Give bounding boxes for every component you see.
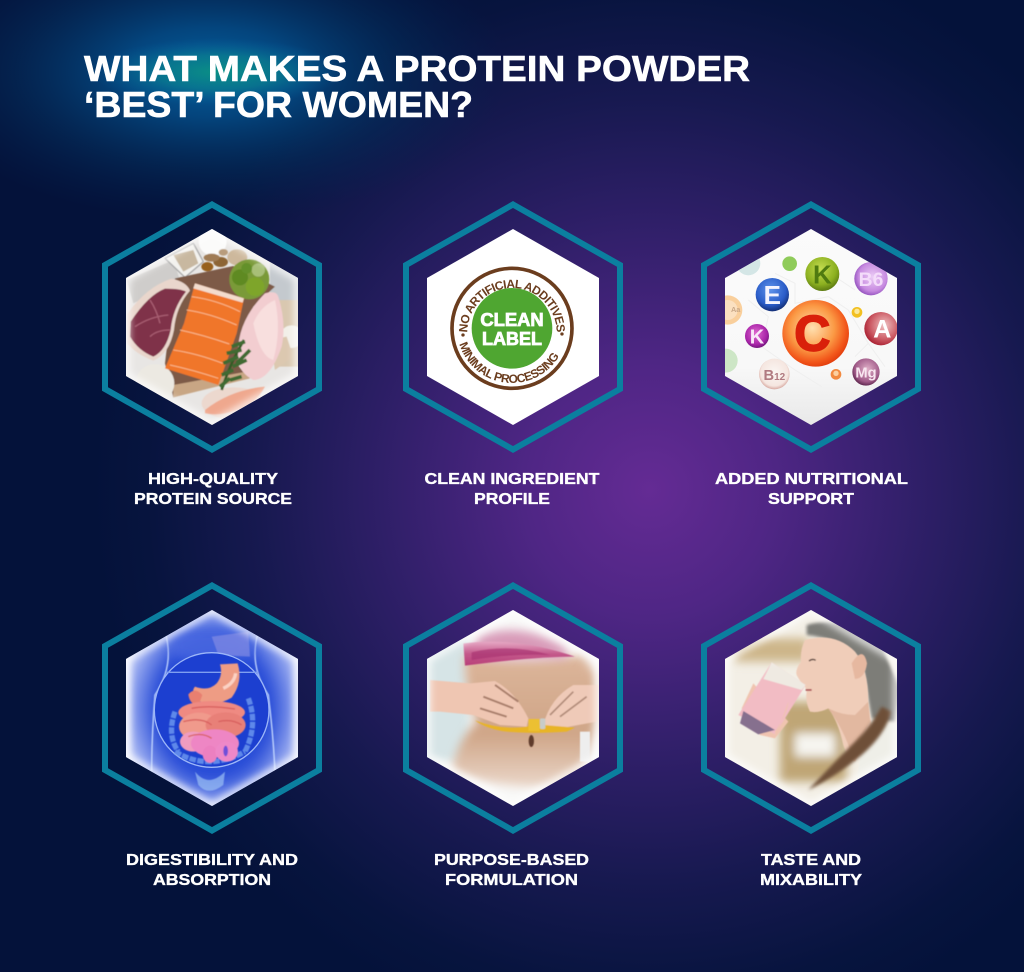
title (84, 48, 750, 125)
label (715, 471, 908, 508)
label: HIGH-QUALITY (148, 471, 279, 488)
hexagon frame (105, 586, 319, 830)
label (134, 471, 292, 508)
title: WHAT MAKES A PROTEIN POWDER (84, 48, 750, 89)
label (126, 852, 298, 889)
vitamin spheres illustration: K (813, 259, 832, 289)
hexagon frame (704, 204, 918, 450)
label: DIGESTIBILITY AND (126, 852, 298, 869)
label (760, 852, 863, 889)
card: purpose-based formulation (406, 586, 620, 889)
hexagon frame (406, 204, 620, 450)
label: MIXABILITY (760, 872, 863, 889)
hexagon frame (406, 586, 620, 830)
vitamin spheres illustration: B12 (763, 368, 786, 384)
clean label badge on white hexagon: CLEAN (480, 309, 544, 330)
label: ADDED NUTRITIONAL (715, 471, 908, 488)
vitamin spheres illustration: Aa (731, 305, 741, 314)
label: SUPPORT (768, 491, 855, 508)
vitamin spheres illustration (725, 229, 897, 425)
card: taste and mixability (704, 586, 918, 889)
label: PURPOSE-BASED (434, 852, 589, 869)
photo: woman drinking shake (721, 608, 901, 808)
card: added nutritional support (704, 204, 918, 508)
clean label badge on white hexagon: MINIMAL PROCESSING (460, 342, 558, 383)
vitamin spheres illustration: E (764, 280, 781, 310)
card: high-quality protein source (105, 204, 319, 508)
label (434, 852, 589, 889)
vitamin spheres illustration: K (750, 326, 765, 348)
hexagon frame (105, 204, 319, 450)
label: FORMULATION (445, 872, 578, 889)
vitamin spheres illustration: A (873, 316, 891, 344)
label (424, 471, 600, 508)
card: clean ingredient profile (403, 201, 623, 508)
clean label badge on white hexagon: LABEL (482, 328, 542, 349)
vitamin spheres illustration: C (794, 306, 830, 362)
label: ABSORPTION (153, 872, 271, 889)
illustration: digestive system (122, 608, 302, 808)
card: digestibility and absorption (105, 586, 319, 889)
label: CLEAN INGREDIENT (424, 471, 600, 488)
label: PROFILE (474, 491, 550, 508)
hexagon frame (704, 586, 918, 830)
photo: measuring waist (420, 608, 603, 808)
vitamin spheres illustration: Mg (855, 365, 877, 381)
title: ‘BEST’ FOR WOMEN? (84, 84, 473, 125)
vitamin spheres illustration: B6 (859, 270, 884, 291)
clean label badge on white hexagon (427, 229, 599, 425)
label: PROTEIN SOURCE (134, 491, 292, 508)
label: TASTE AND (761, 852, 861, 869)
photo: protein foods (122, 227, 303, 427)
clean label badge on white hexagon: NO ARTIFICIAL ADDITIVES (459, 280, 565, 332)
